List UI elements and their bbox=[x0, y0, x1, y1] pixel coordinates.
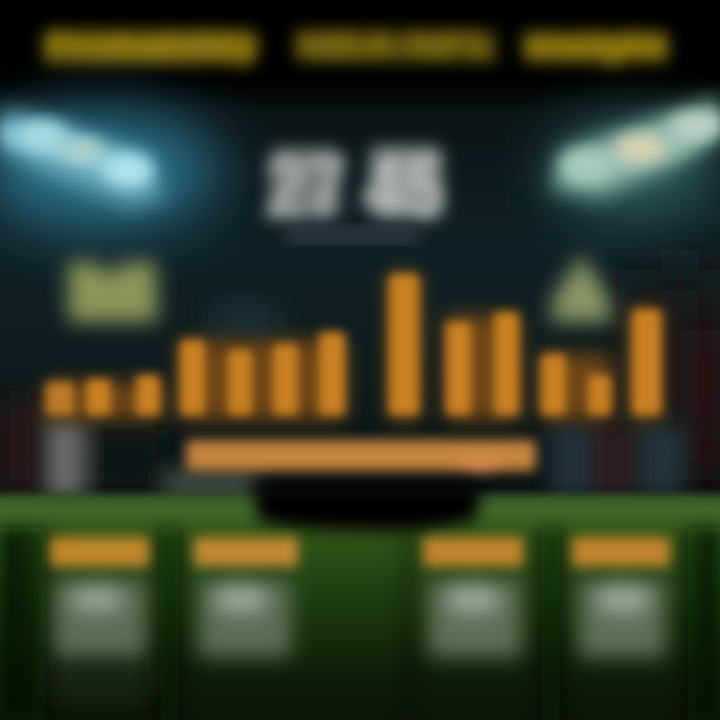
bar chart bbox=[45, 274, 662, 420]
card 3 body bbox=[429, 580, 521, 656]
scoreboard score: 45 bbox=[362, 138, 446, 237]
panel: stat card 1 bbox=[50, 537, 149, 656]
bars bbox=[46, 274, 661, 415]
card 2 body bbox=[199, 580, 291, 656]
title: NBA NFL bbox=[294, 25, 498, 66]
panel: stat card 2 bbox=[194, 537, 298, 656]
scoreboard caption bbox=[285, 228, 420, 241]
right floodlight bbox=[550, 95, 720, 220]
card 1 header bbox=[50, 537, 149, 567]
black centre podium bbox=[254, 486, 482, 531]
left floodlight bbox=[0, 108, 220, 230]
panel: stat card 4 bbox=[572, 537, 670, 656]
card 4 header bbox=[572, 537, 670, 567]
right trophy icon bbox=[550, 254, 614, 322]
title: Probability bbox=[44, 25, 260, 66]
card 2 header bbox=[194, 537, 298, 567]
bar glow bbox=[45, 274, 662, 420]
title bbox=[44, 25, 668, 66]
panel: stat card 3 bbox=[423, 537, 523, 656]
title: Insight bbox=[522, 25, 668, 66]
card 3 header bbox=[423, 537, 523, 567]
card 4 body bbox=[579, 580, 665, 656]
left trophy icon bbox=[68, 262, 158, 322]
stands and goal posts bbox=[46, 420, 685, 500]
scoreboard score bbox=[264, 138, 446, 237]
scoreboard score: 27 bbox=[264, 138, 348, 237]
card 1 body bbox=[54, 580, 146, 656]
grass field bbox=[0, 488, 720, 720]
orange banner bbox=[186, 440, 536, 473]
